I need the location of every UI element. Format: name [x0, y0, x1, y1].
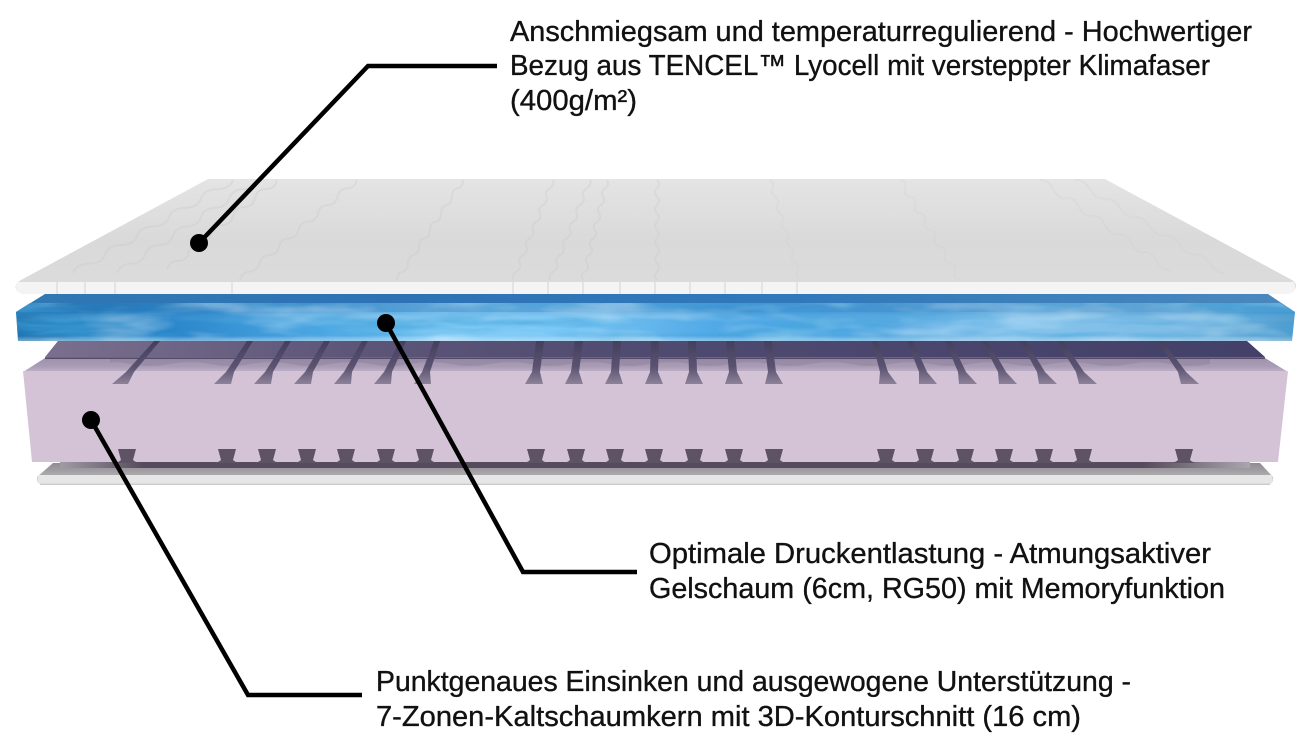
text: gel foam description: Gelschaum (6cm, RG50) mit Memoryfunktion	[649, 573, 1225, 605]
leader line: cover	[190, 66, 497, 252]
text: cover description: Bezug aus TENCEL™ Lyocell mit versteppter Klimafaser	[510, 50, 1210, 82]
bottom cover layer	[37, 461, 1273, 485]
core foam back side	[45, 341, 1265, 357]
leader line: gel foam	[377, 314, 637, 572]
text: core foam description: 7-Zonen-Kaltschaumkern mit 3D-Konturschnitt (16 cm)	[376, 701, 1081, 733]
text: cover description: (400g/m²)	[510, 85, 637, 117]
core foam front	[23, 371, 1288, 462]
text: gel foam description: Optimale Druckentlastung - Atmungsaktiver	[649, 538, 1211, 570]
text: gel foam description	[649, 538, 1225, 605]
core foam top surface	[23, 358, 1288, 372]
mattress illustration	[16, 179, 1296, 485]
leader line: core foam	[82, 411, 362, 695]
bottom contour cuts	[111, 449, 1200, 463]
text: cover description	[510, 16, 1252, 117]
text: core foam description: Punktgenaues Einsinken und ausgewogene Unterstützung -	[376, 666, 1131, 698]
top cover layer	[16, 179, 1296, 294]
top contour cuts	[112, 341, 1199, 384]
text: core foam description	[376, 666, 1131, 733]
gel foam layer	[16, 294, 1296, 342]
text: cover description: Anschmiegsam und temperaturregulierend - Hochwertiger	[510, 16, 1252, 48]
